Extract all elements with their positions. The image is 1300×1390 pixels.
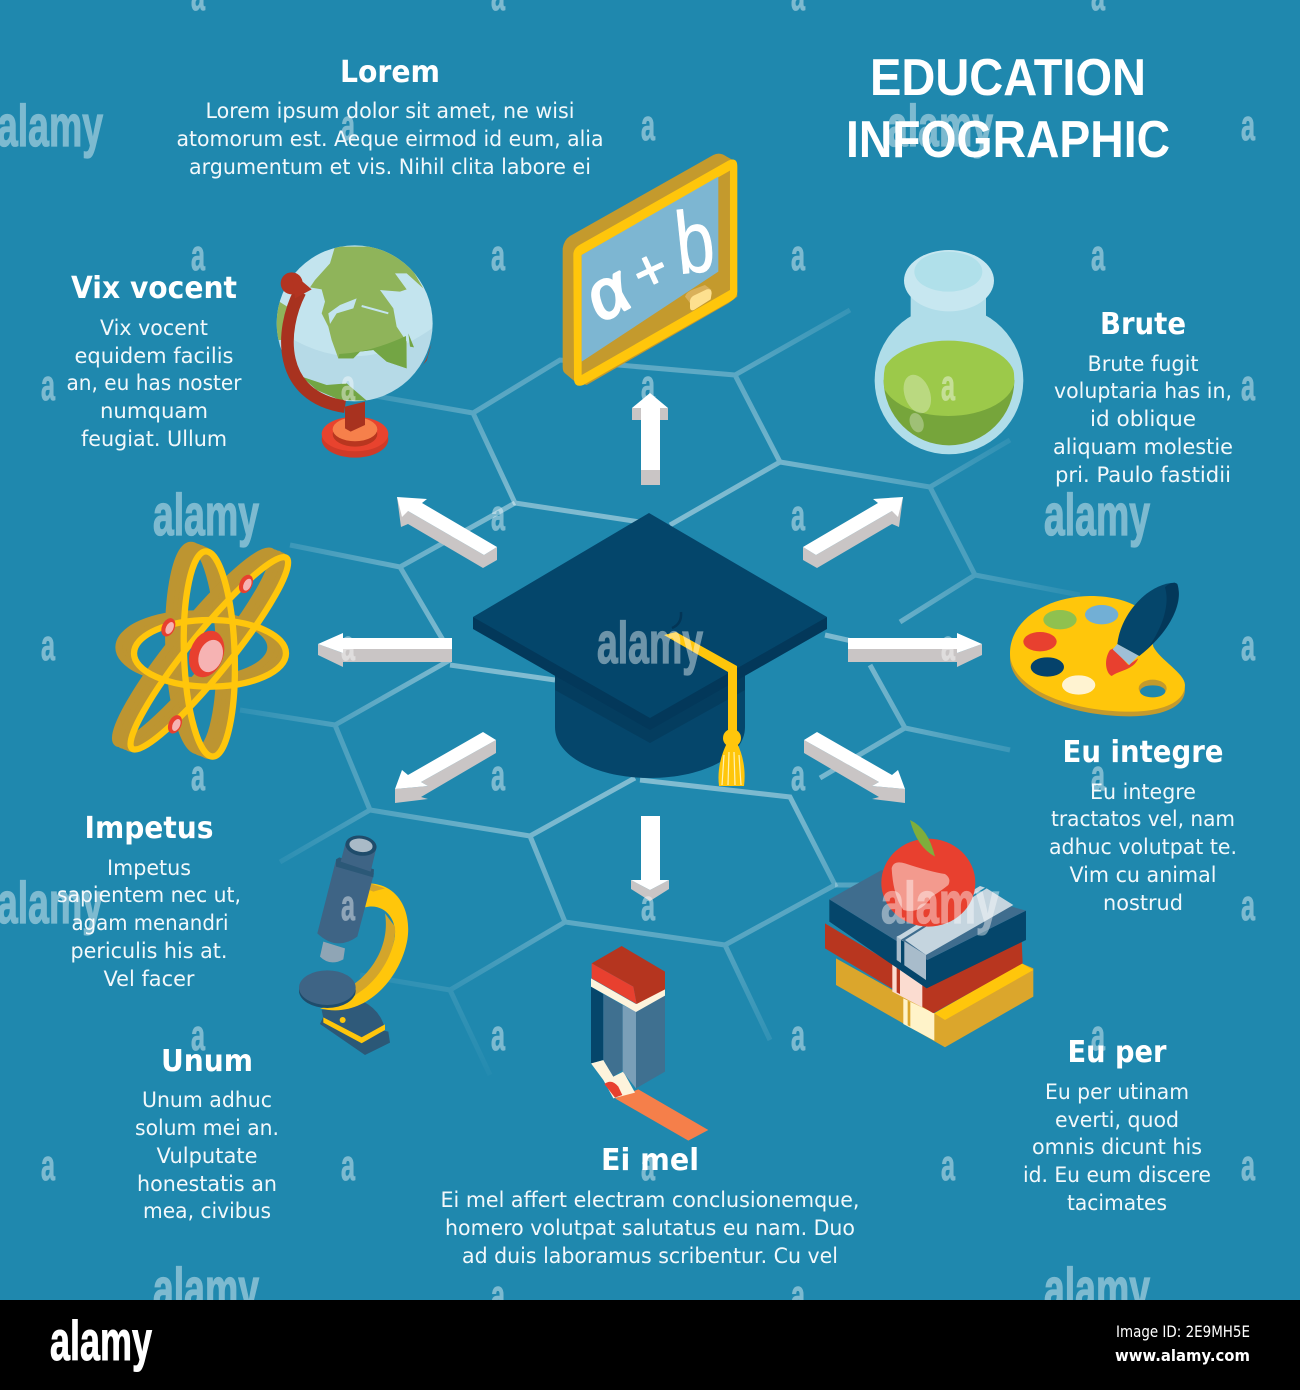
title: INFOGRAPHIC (846, 111, 1170, 169)
microscope stage (299, 970, 356, 1008)
icon: stack of books with apple (825, 820, 1033, 1047)
text block: Vix vocent: Vix vocent (71, 271, 237, 306)
microscope arm (320, 883, 408, 1010)
watermark: alamy stamps: alamy (0, 94, 103, 159)
watermark: alamy stamps: a (941, 361, 955, 410)
text block: Eu per: tacimates (1067, 1191, 1167, 1215)
pencil band (591, 978, 665, 1012)
arrow: down to pencil (631, 816, 669, 901)
arrow: up-left to globe (397, 497, 497, 568)
microscope base (320, 1002, 390, 1055)
text block: Ei mel: ad duis laboramus scribentur. Cu vel (462, 1244, 838, 1268)
text block: Vix vocent: an, eu has noster (66, 371, 242, 395)
text block: Eu per: id. Eu eum discere (1023, 1163, 1211, 1187)
text block: Eu integre: adhuc volutpat te. (1049, 835, 1237, 859)
text block: Eu integre: Vim cu animal (1070, 863, 1216, 887)
text block: Eu per: omnis dicunt his (1032, 1135, 1202, 1159)
arrow: left to atom (318, 633, 452, 667)
tassel cord (664, 632, 737, 734)
text block: Lorem: Lorem ipsum dolor sit amet, ne wisi (206, 99, 574, 123)
watermark: alamy stamps: a (941, 621, 955, 670)
watermark: alamy stamps: a (41, 361, 55, 410)
text block: Eu integre: nostrud (1103, 891, 1183, 915)
text block: Ei mel: homero volutpat salutatus eu nam. Duo (445, 1216, 855, 1240)
watermark: alamy stamps: a (791, 1271, 805, 1320)
continents (273, 247, 437, 403)
watermark: alamy stamps: a (791, 1011, 805, 1060)
text block: Unum: Unum (161, 1044, 253, 1079)
footer logo: alamy (50, 1309, 152, 1372)
pencil line (615, 1089, 708, 1141)
watermark: alamy stamps: a (1091, 1011, 1105, 1060)
electrons (159, 573, 256, 736)
text block: Eu per (1023, 1035, 1211, 1215)
text block: Brute: voluptaria has in, (1054, 379, 1232, 403)
pencil tip (591, 1060, 635, 1098)
watermark: alamy stamps: alamy (887, 94, 993, 159)
watermark: alamy stamps: a (641, 361, 655, 410)
text block: Brute: Brute (1100, 307, 1186, 342)
microscope tube (317, 834, 378, 962)
arrow: down-left to microscope (395, 732, 496, 803)
watermark: alamy stamps: a (341, 621, 355, 670)
text block: Brute (1053, 307, 1233, 487)
pencil eraser (592, 946, 665, 1004)
icon: pencil (591, 946, 708, 1141)
watermark: alamy stamps: a (791, 231, 805, 280)
icon: atom (101, 539, 303, 762)
text block: Vix vocent: Vix vocent (100, 316, 208, 340)
footer bar (0, 1300, 1300, 1390)
icon: palette and brush (1010, 583, 1185, 716)
chalk formula: + (622, 235, 679, 306)
icon: flask (875, 250, 1023, 454)
watermark: alamy stamps: a (341, 101, 355, 150)
text block: Impetus: Impetus (107, 856, 191, 880)
chalk formula: α (572, 250, 644, 336)
text block: Vix vocent: numquam (100, 399, 208, 423)
text block: Brute: pri. Paulo fastidii (1055, 463, 1231, 487)
text block: Lorem (176, 55, 604, 179)
brush (1106, 583, 1179, 676)
apple (881, 820, 975, 927)
title (846, 49, 1170, 169)
top book (829, 870, 1026, 988)
text block: Unum: mea, civibus (143, 1199, 271, 1223)
image id: Image ID: 2E9MH5E (1116, 1322, 1250, 1341)
text block: Vix vocent: equidem facilis (74, 344, 234, 368)
text block: Unum: solum mei an. (135, 1116, 279, 1140)
watermark: alamy stamps: alamy (153, 483, 259, 548)
text block: Lorem: atomorum est. Aeque eirmod id eum, alia (176, 127, 604, 151)
watermark: alamy stamps: a (491, 1011, 505, 1060)
arrow: down-right to books (804, 732, 905, 803)
watermark: alamy stamps: alamy (597, 611, 703, 676)
text block: Eu integre: Eu integre (1062, 735, 1224, 770)
middle book (825, 923, 1023, 1013)
text block: Ei mel: Ei mel affert electram conclusionemque, (440, 1188, 860, 1212)
watermark: alamy stamps: a (1241, 621, 1255, 670)
arrow: up to blackboard (632, 393, 668, 485)
text block: Impetus: sapientem nec ut, (57, 883, 241, 907)
icon: microscope (299, 834, 408, 1055)
pencil body (591, 987, 665, 1088)
text block: Lorem: Lorem (340, 55, 440, 90)
watermark: alamy stamps: a (1091, 751, 1105, 800)
watermark: alamy stamps: a (641, 101, 655, 150)
bottom book (836, 958, 1033, 1047)
text block: Lorem: argumentum et vis. Nihil clita labore ei (189, 155, 591, 179)
watermark: alamy stamps: a (341, 1141, 355, 1190)
text block: Vix vocent: feugiat. Ullum (81, 427, 227, 451)
watermark: alamy stamps: a (791, 491, 805, 540)
icon: graduation cap (473, 513, 827, 786)
chalk piece (685, 285, 712, 310)
watermark: alamy stamps: alamy (1044, 1257, 1150, 1322)
chalk formula (572, 190, 719, 336)
watermark: alamy stamps: a (191, 231, 205, 280)
text block: Brute: id oblique (1090, 407, 1196, 431)
arrow: up-right to flask (803, 497, 903, 568)
text block: Eu per: Eu per (1068, 1035, 1167, 1070)
watermark: alamy stamps: a (941, 1141, 955, 1190)
text block: Impetus: Vel facer (104, 967, 195, 991)
watermark: alamy stamps: a (41, 1141, 55, 1190)
text block: Ei mel: Ei mel (601, 1143, 699, 1178)
chalk formula: b (671, 190, 719, 293)
text block: Impetus: Impetus (84, 811, 214, 846)
watermark: alamy stamps: a (491, 751, 505, 800)
watermark: alamy stamps: a (641, 881, 655, 930)
watermark: alamy stamps: a (491, 231, 505, 280)
watermark: alamy stamps: a (341, 361, 355, 410)
watermark: alamy stamps: a (1241, 1141, 1255, 1190)
watermark: alamy stamps: a (191, 1011, 205, 1060)
watermark: alamy stamps: a (491, 1271, 505, 1320)
flask glass (875, 250, 1023, 454)
watermark: alamy stamps: alamy (0, 871, 103, 936)
icon: blackboard (563, 154, 737, 386)
watermark: alamy stamps: a (1241, 361, 1255, 410)
watermark: alamy stamps: a (1241, 101, 1255, 150)
text block: Unum: Unum adhuc (142, 1088, 272, 1112)
text block: Eu per: everti, quod (1055, 1108, 1179, 1132)
watermark: alamy stamps: alamy (1044, 483, 1150, 548)
website: www.alamy.com (1115, 1346, 1250, 1365)
text block: Impetus: agam menandri (72, 911, 228, 935)
text block: Vix vocent (66, 271, 242, 451)
text block: Unum: Vulputate (156, 1144, 258, 1168)
watermark: alamy stamps: a (191, 751, 205, 800)
text block: Eu integre: tractatos vel, nam (1051, 807, 1235, 831)
watermark: alamy stamps: a (641, 1141, 655, 1190)
nucleus (183, 626, 231, 682)
text block: Impetus (57, 811, 241, 991)
title: EDUCATION (870, 49, 1146, 107)
text block: Impetus: periculis his at. (70, 939, 228, 963)
flask liquid (884, 340, 1014, 446)
watermark: alamy stamps: a (791, 751, 805, 800)
watermark: alamy stamps: alamy (153, 1257, 259, 1322)
text block: Brute: aliquam molestie (1053, 435, 1233, 459)
chalkboard surface (582, 177, 718, 362)
watermark: alamy stamps: alamy (881, 871, 999, 936)
text block: Eu integre (1049, 735, 1237, 915)
atom ring depth (101, 539, 299, 760)
atom rings (116, 545, 303, 762)
watermark: alamy stamps: a (1241, 881, 1255, 930)
text block: Ei mel (440, 1143, 860, 1268)
watermark: alamy stamps: a (491, 491, 505, 540)
text block: Unum: honestatis an (137, 1172, 277, 1196)
watermark: alamy stamps: a (41, 621, 55, 670)
text block: Brute: Brute fugit (1088, 352, 1198, 376)
tassel (718, 729, 745, 786)
text block: Eu integre: Eu integre (1090, 780, 1196, 804)
icon: globe (273, 245, 437, 458)
arrow: right to palette (848, 633, 982, 667)
globe stand (281, 272, 388, 458)
watermark: alamy stamps: a (1091, 231, 1105, 280)
text block: Eu per: Eu per utinam (1045, 1080, 1189, 1104)
text block: Unum (135, 1044, 279, 1223)
watermark: alamy stamps: a (341, 881, 355, 930)
